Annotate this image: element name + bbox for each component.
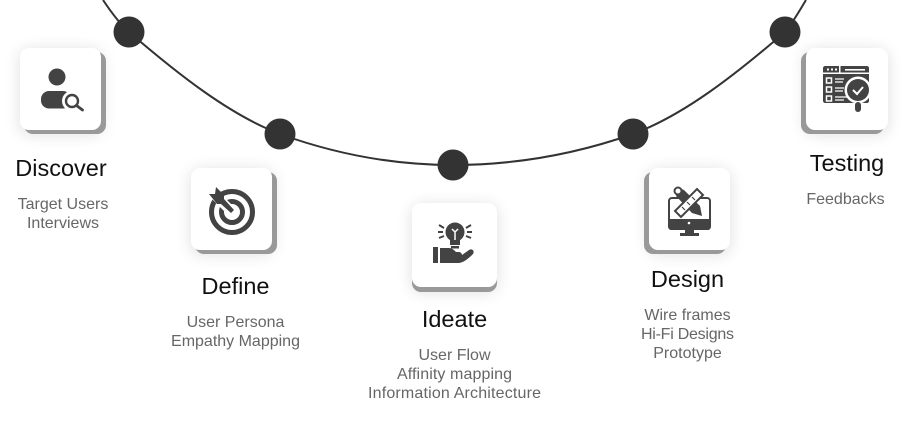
text: Discover items: Target Users <box>18 196 108 213</box>
panel: Design <box>641 168 734 362</box>
text: Testing items: Feedbacks <box>806 191 885 208</box>
timeline node: Ideate <box>438 150 468 180</box>
text: Define items: Empathy Mapping <box>171 333 300 350</box>
timeline node: Testing <box>770 16 800 48</box>
curved timeline <box>103 0 806 180</box>
panel: Define <box>171 168 300 350</box>
timeline node: Design <box>618 118 648 150</box>
text: Define items <box>171 314 300 350</box>
heading: Define: Define <box>202 273 269 299</box>
icon: monitor with ruler and pencil <box>668 188 711 236</box>
icon: user search <box>41 68 82 111</box>
text: Design items: Prototype <box>653 345 722 362</box>
heading: Ideate: Ideate <box>422 306 487 332</box>
text: Define items: User Persona <box>187 314 285 331</box>
text: Design items: Wire frames <box>644 307 731 324</box>
panel: Discover <box>15 48 108 232</box>
timeline node: Discover <box>114 16 144 48</box>
panel: Ideate <box>368 203 541 402</box>
text: Discover items <box>18 196 108 232</box>
panel: Testing <box>801 48 888 208</box>
text: Ideate items: Information Architecture <box>368 385 541 402</box>
text: Ideate items: User Flow <box>418 347 491 364</box>
heading: Testing: Testing <box>810 150 884 176</box>
heading: Discover: Discover <box>15 155 107 181</box>
timeline node: Define <box>264 118 296 150</box>
text: Design items: Hi-Fi Designs <box>641 326 734 343</box>
text: Ideate items <box>368 347 541 402</box>
text: Ideate items: Affinity mapping <box>397 366 512 383</box>
text: Design items <box>641 307 734 362</box>
text: Discover items: Interviews <box>27 215 99 232</box>
icon: test report with magnifier <box>823 66 872 112</box>
heading: Design: Design <box>651 266 724 292</box>
icon: target with arrow <box>208 187 252 232</box>
icon: hand holding light bulb <box>433 222 474 263</box>
